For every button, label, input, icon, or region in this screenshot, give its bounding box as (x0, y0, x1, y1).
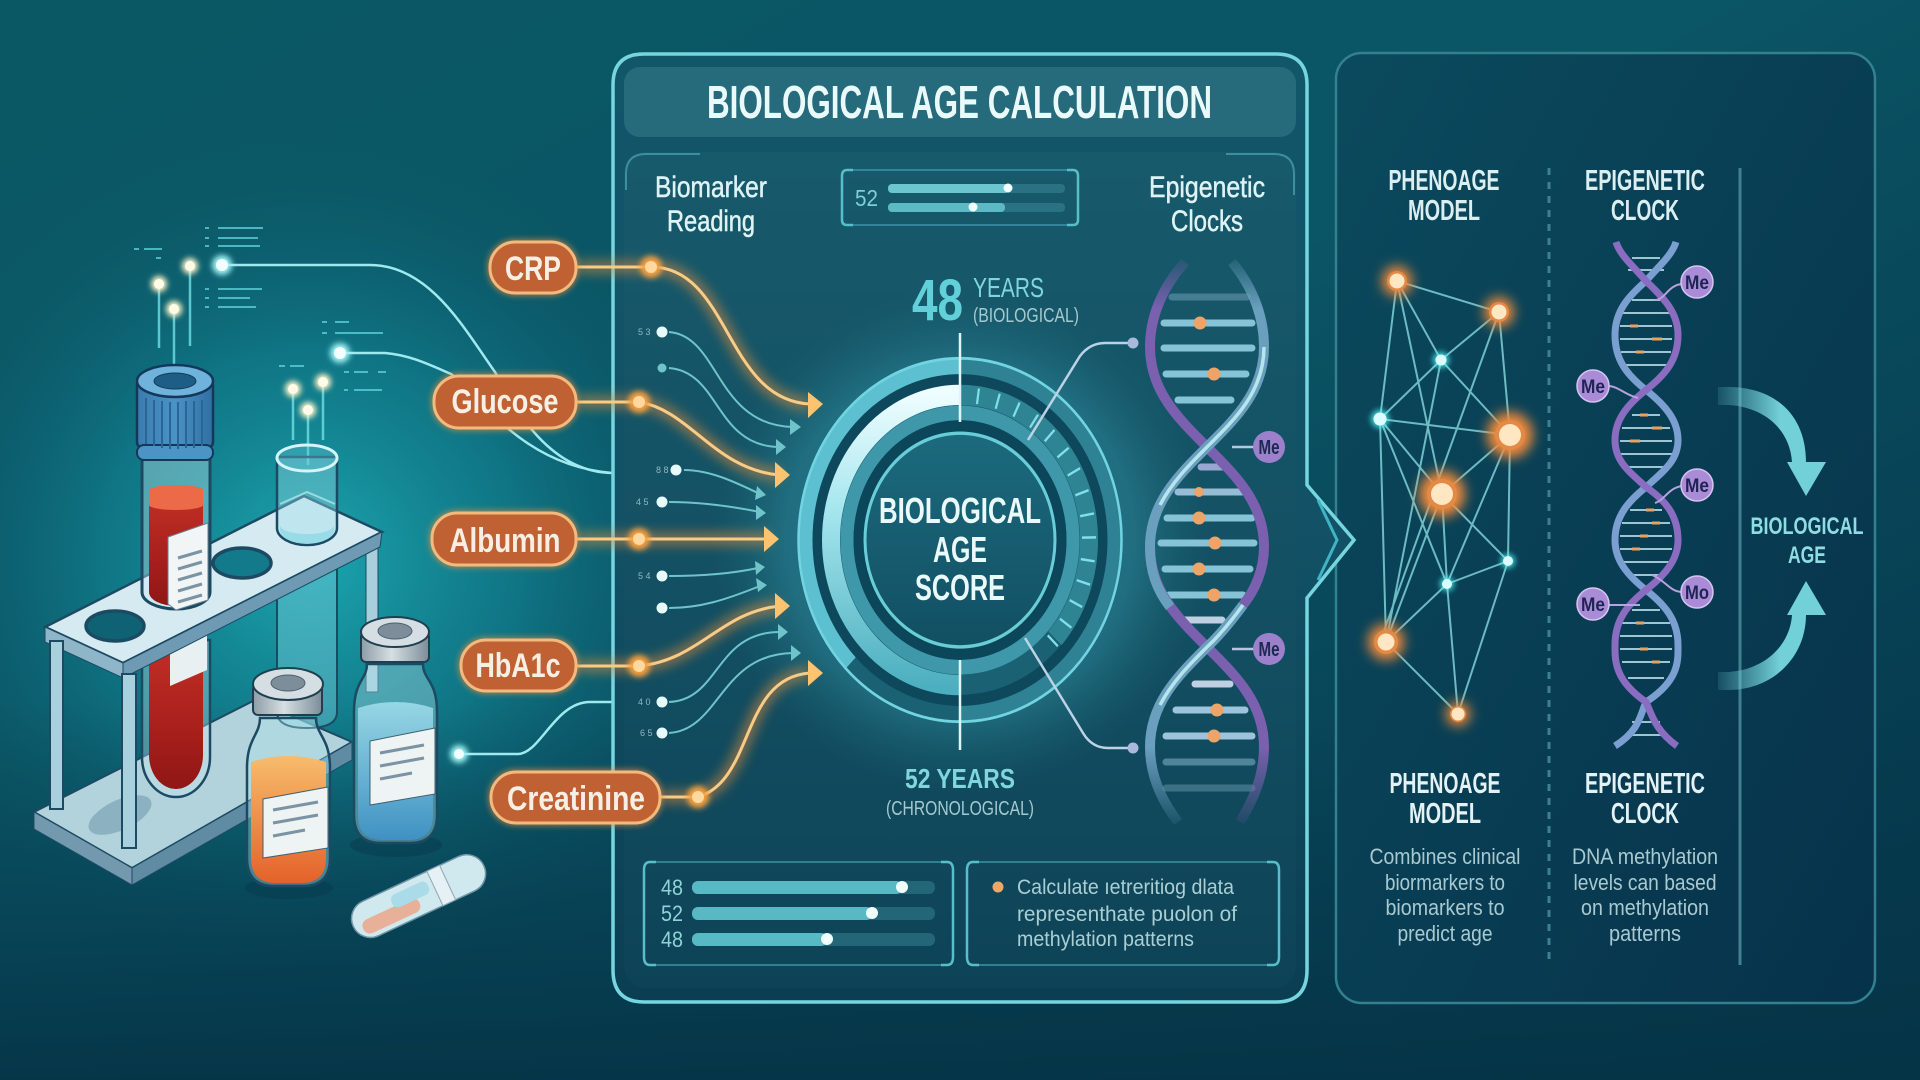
caption: epigenetic description: levels can based (1574, 870, 1716, 895)
label: biomarker reading: Reading (667, 205, 755, 238)
teal data flow arrows: 4 5 (636, 497, 649, 507)
clock dna rungs (1620, 258, 1672, 735)
me tags (1232, 431, 1285, 665)
teal data flow arrows: 8 8 (656, 465, 669, 475)
gauge: biological age score (798, 358, 1122, 722)
blue liquid vial (350, 617, 442, 857)
caption: phenoage description: predict age (1398, 921, 1492, 946)
label: biomarker reading: Biomarker (655, 171, 767, 204)
box: stat bars (644, 862, 953, 965)
title: BIOLOGICAL AGE CALCULATION (707, 76, 1212, 128)
chronological age reading (886, 763, 1034, 820)
caption heading: epigenetic clock: CLOCK (1611, 798, 1679, 830)
label: biological age: AGE (1788, 542, 1826, 569)
label: biological age: BIOLOGICAL (1750, 513, 1864, 540)
divider: dashed (1548, 168, 1550, 960)
caption heading: phenoage model: PHENOAGE (1390, 768, 1500, 800)
box: methylation note: methylation patterns (1017, 928, 1194, 951)
arrow: into biological age top (1718, 387, 1826, 496)
divider: solid (1738, 168, 1742, 965)
caption: phenoage description: biormarkers to (1385, 870, 1505, 895)
leader lines to dna (1025, 338, 1138, 754)
box: stat bars: 48 (661, 875, 683, 900)
icon: dna helix with methylation (1150, 262, 1285, 822)
pill: HbA1c (458, 637, 579, 694)
gauge score text: BIOLOGICAL (879, 490, 1041, 531)
teal data flow arrows (636, 326, 801, 738)
gauge score text (879, 490, 1041, 608)
pill: Glucose (431, 373, 579, 431)
caption heading: phenoage model: MODEL (1409, 798, 1481, 830)
pill: HbA1c: HbA1c (476, 647, 560, 685)
chronological age reading: (CHRONOLOGICAL) (886, 798, 1034, 820)
dna strands (1150, 262, 1264, 822)
pill: Albumin (429, 510, 579, 568)
me tags: Me (1685, 476, 1709, 497)
arrow: into biological age bottom (1718, 581, 1826, 690)
me tags: Mo (1685, 583, 1709, 604)
chronological age reading: 52 YEARS (905, 763, 1015, 794)
heading: epigenetic clock: CLOCK (1611, 195, 1679, 227)
teal data flow arrows: 5 3 (638, 327, 651, 337)
orange biomarker flow arrows (577, 256, 823, 808)
gauge pointer lines (959, 333, 961, 750)
nodes (628, 256, 709, 808)
chart: phenoage network (1368, 266, 1533, 726)
teal data flow arrows: 5 4 (638, 571, 651, 581)
pill: Creatinine: Creatinine (507, 780, 645, 818)
red tube lower (142, 630, 210, 797)
teal data flow arrows: 4 0 (638, 697, 651, 707)
pill: CRP: CRP (505, 250, 561, 288)
heading: phenoage model: MODEL (1408, 195, 1480, 227)
me tags: Me (1258, 639, 1280, 661)
orange liquid vial (245, 668, 333, 899)
clock dna strands (1615, 242, 1678, 746)
clear test tube upper (277, 445, 337, 545)
caption: epigenetic description: on methylation (1581, 895, 1709, 920)
panel: models (1336, 53, 1875, 1003)
panel: biological age calculation (613, 54, 1354, 1002)
top reading bars (842, 170, 1078, 225)
front rack legs (50, 641, 136, 848)
heading: epigenetic clock (1585, 165, 1705, 227)
rack top plate (45, 496, 382, 678)
biological age reading: 48 (912, 268, 963, 333)
glow (577, 267, 810, 797)
methyl dots (1192, 316, 1224, 742)
caption: epigenetic description: DNA methylation (1572, 844, 1718, 869)
glowing probes above tubes (151, 258, 331, 465)
box: methylation note (967, 862, 1279, 965)
rear rack leg (366, 547, 378, 692)
data readout dashes (134, 228, 386, 390)
signal line: test tube to panel (212, 255, 612, 763)
arrowheads (764, 392, 823, 686)
me tags: Me (1581, 595, 1605, 616)
me tags: Me (1258, 437, 1280, 459)
caption: phenoage description: biomarkers to (1386, 895, 1504, 920)
box: stat bars: 48 (661, 927, 683, 952)
caption heading: epigenetic clock: EPIGENETIC (1585, 768, 1705, 800)
caption: epigenetic description (1572, 844, 1718, 946)
label: biomarker reading (655, 171, 767, 238)
biological age reading: (BIOLOGICAL) (973, 305, 1079, 327)
label: epigenetic clocks (1149, 171, 1265, 238)
pill: CRP (487, 239, 579, 296)
red blood test tube upper (137, 365, 213, 610)
inner chevron (1318, 500, 1337, 580)
lines (577, 267, 810, 797)
caption: epigenetic description: patterns (1609, 921, 1681, 946)
heading: phenoage model: PHENOAGE (1388, 165, 1500, 197)
header bar (624, 67, 1296, 137)
biomarker pills (429, 239, 663, 826)
heading: epigenetic clock: EPIGENETIC (1585, 165, 1705, 197)
dna rungs (1161, 297, 1254, 788)
gauge score text: SCORE (915, 567, 1005, 608)
clock dna base marks (1630, 326, 1662, 662)
heading: phenoage model (1388, 165, 1500, 227)
top reading bars: 52 (855, 185, 878, 211)
label: epigenetic clocks: Epigenetic (1149, 171, 1265, 204)
capsule tube (345, 848, 492, 944)
caption: phenoage description: Combines clinical (1370, 844, 1520, 869)
pill: Glucose: Glucose (452, 383, 558, 421)
icon: epigenetic clock dna (1577, 242, 1713, 746)
biological age reading: YEARS (973, 272, 1044, 303)
label: biological age (1750, 513, 1864, 569)
clear tube lower (277, 560, 337, 728)
me tags (1577, 266, 1713, 620)
teal data flow arrows: 6 5 (640, 728, 653, 738)
gauge score text: AGE (933, 529, 987, 570)
pill: Albumin: Albumin (450, 522, 560, 560)
rack base (34, 700, 352, 885)
pill: Creatinine (488, 769, 663, 826)
caption heading: phenoage model (1390, 768, 1500, 830)
box: methylation note: representhate puolon of (1017, 903, 1237, 926)
me tags: Me (1581, 377, 1605, 398)
label: epigenetic clocks: Clocks (1171, 205, 1243, 238)
biological age reading (912, 268, 1079, 333)
me tags: Me (1685, 273, 1709, 294)
illustration: lab test tubes, rack and vials (34, 228, 492, 944)
box: methylation note: Calculate ıetreritiog dlata (1017, 876, 1234, 899)
caption heading: epigenetic clock (1585, 768, 1705, 830)
caption: phenoage description (1370, 844, 1520, 946)
box: stat bars: 52 (661, 901, 683, 926)
